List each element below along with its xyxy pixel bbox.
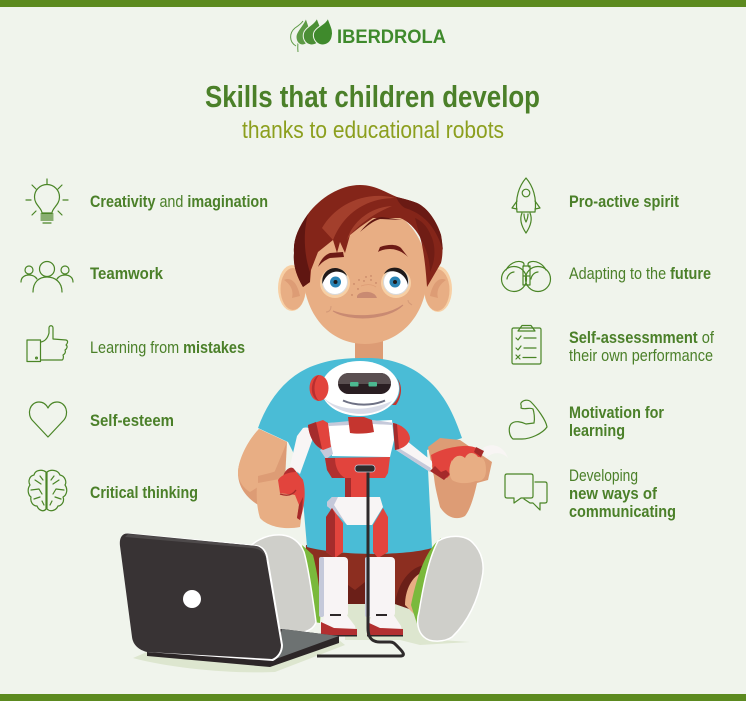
freckles and nose bbox=[351, 275, 377, 298]
icon: thumbs up bbox=[27, 326, 68, 362]
robot pelvis bbox=[325, 457, 390, 478]
skill: motivation: learning bbox=[569, 422, 625, 440]
skill: self-assessment bbox=[569, 329, 714, 365]
logo: Iberdrola bbox=[291, 18, 446, 52]
hair bbox=[294, 185, 442, 287]
t-shirt bbox=[258, 358, 462, 554]
right shoe bbox=[411, 538, 441, 627]
robot head bbox=[392, 378, 401, 405]
robot right-hand blur bbox=[483, 445, 508, 458]
robot left arm bbox=[290, 427, 313, 474]
skill: self-assessment: their own performance bbox=[569, 347, 713, 365]
shorts bbox=[304, 545, 436, 612]
robot right arm bbox=[396, 441, 433, 472]
smile bbox=[333, 305, 403, 318]
icon: speech bubbles bbox=[505, 474, 547, 510]
logo: Iberdrola: IBERDROLA bbox=[337, 27, 446, 48]
skill: motivation: Motivation for bbox=[569, 404, 664, 422]
right glove bbox=[431, 446, 483, 478]
fist right bbox=[449, 453, 486, 483]
robot hips bbox=[327, 497, 383, 525]
icon: brain bbox=[28, 470, 67, 511]
skill: self-assessment: Self-assessmment of bbox=[569, 329, 714, 347]
icon: light bulb bbox=[26, 179, 68, 223]
icon: flexed arm bbox=[509, 400, 547, 439]
skill: teamwork: Teamwork bbox=[90, 265, 164, 283]
eyebrows bbox=[318, 252, 344, 267]
skill: communicating bbox=[569, 467, 676, 521]
skill: critical thinking: Critical thinking bbox=[90, 484, 198, 502]
ground shadows bbox=[133, 600, 470, 672]
icon: heart bbox=[29, 402, 67, 437]
subtitle: thanks to educational robots bbox=[242, 117, 504, 144]
icon: team bbox=[21, 262, 73, 292]
skill: motivation bbox=[569, 404, 664, 440]
robot torso bbox=[328, 420, 394, 457]
skill: creativity: Creativity and imagination bbox=[90, 193, 268, 211]
laptop bbox=[120, 533, 339, 667]
skill: communicating: new ways of bbox=[569, 485, 657, 503]
icon: clipboard bbox=[512, 326, 541, 364]
fist left bbox=[257, 473, 302, 528]
right arm bbox=[428, 438, 492, 518]
skill: adapting to the future: Adapting to the future bbox=[569, 265, 711, 283]
icon: rocket bbox=[512, 178, 540, 233]
left arm bbox=[238, 429, 287, 507]
robot legs bbox=[319, 557, 348, 617]
title: Skills that children develop bbox=[205, 79, 540, 114]
icon: binoculars bbox=[502, 261, 550, 292]
eyes bbox=[320, 268, 411, 298]
left shoe bbox=[302, 545, 321, 623]
robot feet bbox=[321, 614, 357, 636]
skill: self-esteem: Self-esteem bbox=[90, 412, 174, 430]
skill: learning from mistakes: Learning from mistakes bbox=[90, 339, 245, 357]
robot thighs bbox=[326, 508, 343, 558]
skill: communicating: communicating bbox=[569, 503, 676, 521]
robot cable bbox=[317, 470, 403, 656]
illustration: boy with robot and laptop bbox=[120, 185, 508, 672]
ears bbox=[278, 265, 306, 311]
skill: communicating: Developing bbox=[569, 467, 638, 485]
left glove bbox=[283, 468, 303, 480]
neck bbox=[355, 338, 383, 364]
skill: pro-active spirit: Pro-active spirit bbox=[569, 193, 679, 211]
face bbox=[303, 205, 427, 344]
